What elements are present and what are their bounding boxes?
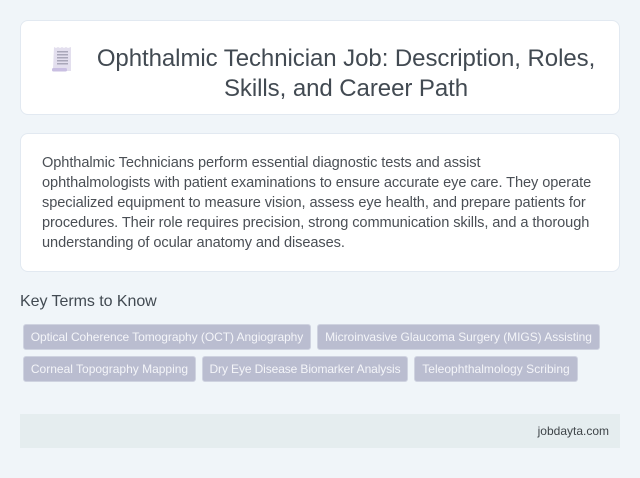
footer: site name: jobdayta.com (538, 424, 609, 438)
tag: dry eye (202, 356, 408, 382)
icon: document scroll (52, 47, 71, 72)
heading: key terms: Key Terms to Know (20, 293, 157, 310)
tag: teleophthalmology (414, 356, 578, 382)
tag: corneal topography (23, 356, 196, 382)
title (97, 45, 595, 102)
tag: corneal topography: Corneal Topography Mapping (31, 362, 188, 376)
tag: MIGS assisting: Microinvasive Glaucoma Surgery (MIGS) Assisting (325, 330, 592, 344)
description text: ophthalmologists with patient examinations to ensure accurate eye care. They operate (42, 175, 591, 191)
tag: MIGS assisting (317, 324, 600, 350)
panel: title card (20, 20, 620, 115)
description text: specialized equipment to measure vision, assess eye health, and prepare patients for (42, 195, 586, 211)
tag: dry eye: Dry Eye Disease Biomarker Analysis (210, 362, 400, 376)
panel: description card (20, 133, 620, 272)
title: Skills, and Career Path (224, 75, 468, 102)
description text: understanding of ocular anatomy and diseases. (42, 235, 345, 251)
description text (42, 155, 591, 251)
footer bar (20, 414, 620, 448)
tag: teleophthalmology: Teleophthalmology Scribing (422, 362, 570, 376)
tag: OCT angiography (23, 324, 311, 350)
description text: Ophthalmic Technicians perform essential diagnostic tests and assist (42, 155, 480, 171)
description text: procedures. Their role requires precision, strong communication skills, and a thorough (42, 215, 589, 231)
title: Ophthalmic Technician Job: Description, Roles, (97, 45, 595, 72)
tag: OCT angiography: Optical Coherence Tomography (OCT) Angiography (31, 330, 303, 344)
